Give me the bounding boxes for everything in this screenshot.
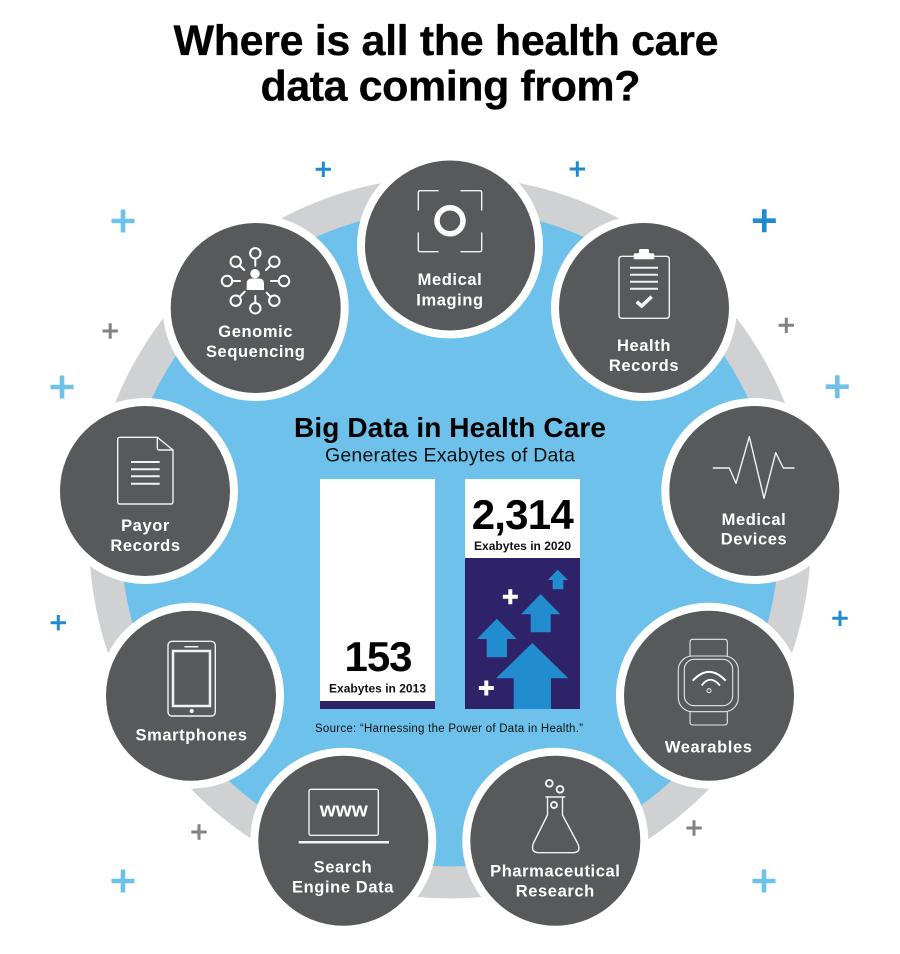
panel: payor records: Records [110,537,181,555]
grey outer ring [89,176,811,898]
panel: medical imaging: Medical [418,271,482,289]
icon: imaging viewfinder [418,191,482,252]
panel: pharmaceutical research [462,748,648,934]
panel: genomic sequencing: Genomic [218,323,293,341]
blue central disc [121,208,779,866]
panel: smartphones [98,603,284,789]
panel: medical devices: Medical [722,511,786,529]
panel: big data heading: Big Data in Health Care [294,412,606,443]
panel: wearables [616,603,802,789]
decorative plus signs [50,161,849,893]
icon: document [118,437,173,504]
panel: health records: Health [617,337,671,355]
title [174,17,718,110]
panel: search engine data [250,748,436,934]
source note: Source: “Harnessing the Power of Data in Health.” [315,723,583,735]
panel: genomic sequencing [163,215,349,401]
panel: health records [551,215,737,401]
panel: health records: Records [609,357,679,375]
panel: smartphones: Smartphones [135,727,248,745]
panel: big data heading: Generates Exabytes of Data [325,444,575,466]
icon: tablet phone [168,641,215,716]
icon: genomic network [222,248,289,313]
panel: medical imaging: Imaging [416,292,484,310]
bar: exabytes in 2013 [320,479,435,709]
panel: big data heading [294,412,606,466]
bar: exabytes in 2020 [465,479,580,709]
icon: clipboard [619,249,669,318]
title: data coming from? [260,62,640,110]
icon: smart watch [678,639,738,725]
panel: payor records [52,398,238,584]
panel: pharmaceutical research: Pharmaceutical [490,863,620,881]
panel: pharmaceutical research: Research [516,882,595,900]
bar: exabytes in 2020: Exabytes in 2020 [474,539,571,553]
panel: medical devices: Devices [721,530,787,548]
icon: laptop with www [299,789,389,842]
panel: payor records: Payor [121,517,170,535]
icon: rising arrows [477,570,568,709]
panel: search engine data: Search [314,859,372,877]
icon: flask with bubbles [533,780,579,853]
icon: laptop with www: www [319,800,368,822]
bar: exabytes in 2013: Exabytes in 2013 [329,681,426,695]
title: Where is all the health care [174,17,718,65]
panel: genomic sequencing: Sequencing [206,343,305,361]
panel: medical imaging [357,152,543,338]
panel: medical devices [661,398,847,584]
icon: heartbeat line [713,437,794,498]
panel: wearables: Wearables [665,739,753,757]
bar: exabytes in 2013: 153 [344,633,412,680]
panel: search engine data: Engine Data [292,879,394,897]
bar: exabytes in 2020: 2,314 [472,491,574,538]
